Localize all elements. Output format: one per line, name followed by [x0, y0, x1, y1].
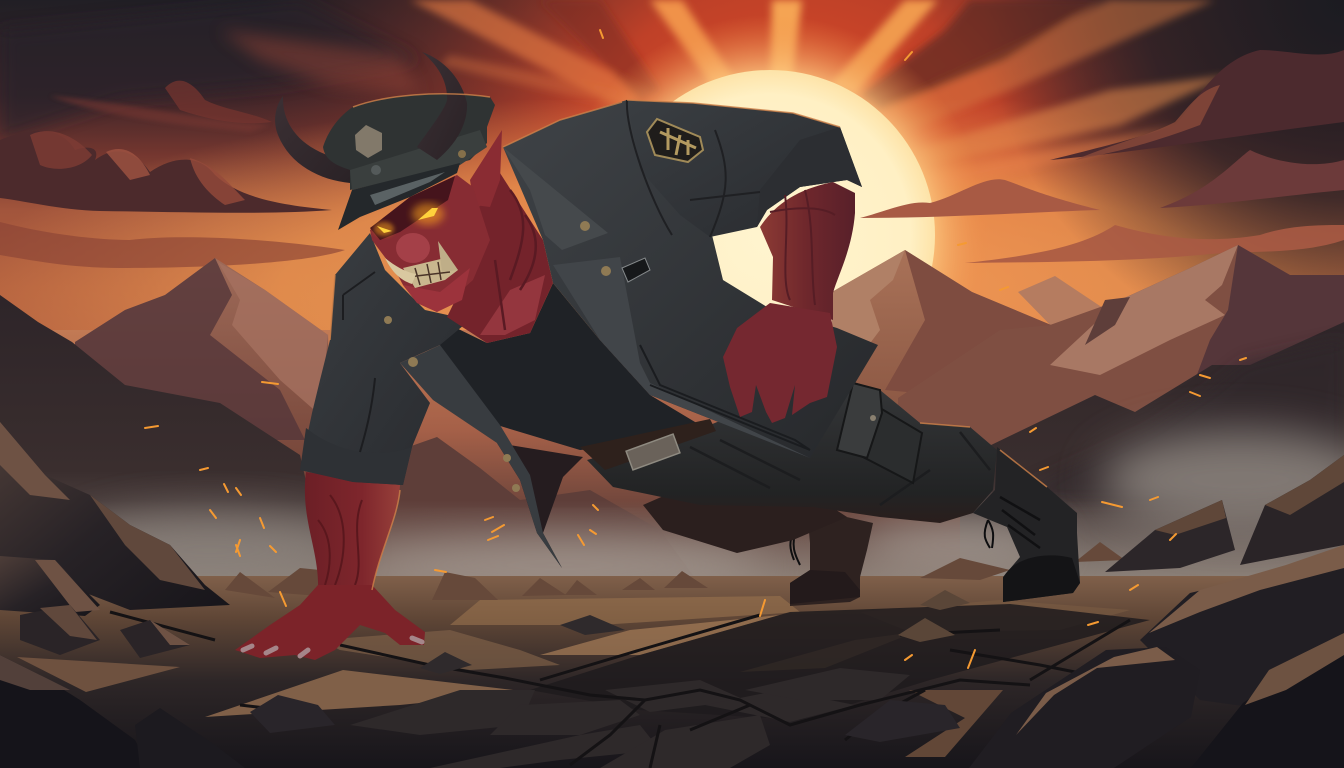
flying sparks — [145, 30, 1246, 668]
raised forearm veins — [770, 190, 835, 305]
horn: left — [275, 96, 350, 183]
front boot — [973, 447, 1080, 602]
raised hand — [723, 303, 837, 423]
upper tusk — [438, 241, 458, 272]
collar — [503, 147, 608, 250]
face — [370, 175, 490, 312]
dark mountains: left — [0, 295, 330, 585]
sun — [605, 70, 935, 400]
far mountains: right peaks — [832, 245, 1344, 470]
pocket tag — [622, 258, 650, 282]
sun rays — [410, 0, 1230, 190]
belt — [580, 419, 716, 470]
sky background — [0, 0, 1344, 480]
mid mountains: centre — [330, 437, 700, 585]
chest highlight — [480, 275, 545, 335]
dark mountains: right — [960, 322, 1344, 585]
clouds: left — [0, 0, 420, 268]
shoulder patch — [647, 119, 703, 162]
sleeve seams — [627, 100, 760, 237]
main jacket body — [503, 100, 878, 458]
jacket tail — [497, 443, 583, 568]
rocks: small on ground — [250, 590, 970, 742]
ground shadow — [530, 604, 1150, 720]
rear leg — [643, 480, 847, 553]
supporting hand — [235, 585, 425, 660]
horn: right — [417, 52, 467, 160]
chest skin — [447, 173, 553, 343]
sleeve seam — [343, 272, 375, 452]
neck lines — [495, 190, 536, 330]
jacket left front — [400, 345, 562, 568]
supporting arm forearm — [305, 472, 400, 592]
jacket front flap — [553, 257, 810, 458]
rear boot — [790, 508, 873, 606]
rocks: horizon — [225, 542, 1125, 600]
raised forearm — [760, 182, 855, 320]
face shadow — [370, 176, 455, 240]
military cap — [323, 94, 495, 230]
raised arm sleeve — [627, 100, 862, 237]
forearm veins — [318, 495, 362, 585]
cracked ground — [0, 576, 1344, 768]
rim light — [330, 94, 1047, 590]
trouser folds — [690, 432, 990, 505]
glowing eyes — [374, 203, 444, 236]
demon soldier — [235, 52, 1080, 660]
teeth gaps — [408, 262, 450, 285]
jacket buttons — [384, 221, 611, 492]
nose — [396, 233, 430, 263]
distant valley haze — [0, 330, 1344, 580]
supporting arm sleeve — [300, 233, 470, 485]
lower tusk — [385, 258, 416, 284]
rocks: right foreground — [969, 455, 1344, 768]
cap badge — [355, 125, 382, 158]
front leg trousers — [587, 375, 997, 523]
belt buckle — [626, 434, 680, 470]
teeth — [403, 258, 458, 288]
nails — [243, 638, 422, 656]
lips — [403, 268, 470, 312]
jacket hem — [640, 345, 810, 450]
sleeve cuff fold — [757, 127, 862, 227]
mist — [0, 430, 1344, 591]
tank top — [440, 283, 700, 450]
sleeve cuff — [300, 428, 412, 485]
ear — [470, 130, 502, 207]
far mountains: left peak — [75, 258, 330, 480]
paving stones — [350, 668, 910, 768]
rocks: left foreground — [0, 422, 245, 768]
sun glow — [550, 15, 990, 455]
clouds: right — [860, 50, 1344, 263]
cargo pocket — [837, 383, 922, 483]
